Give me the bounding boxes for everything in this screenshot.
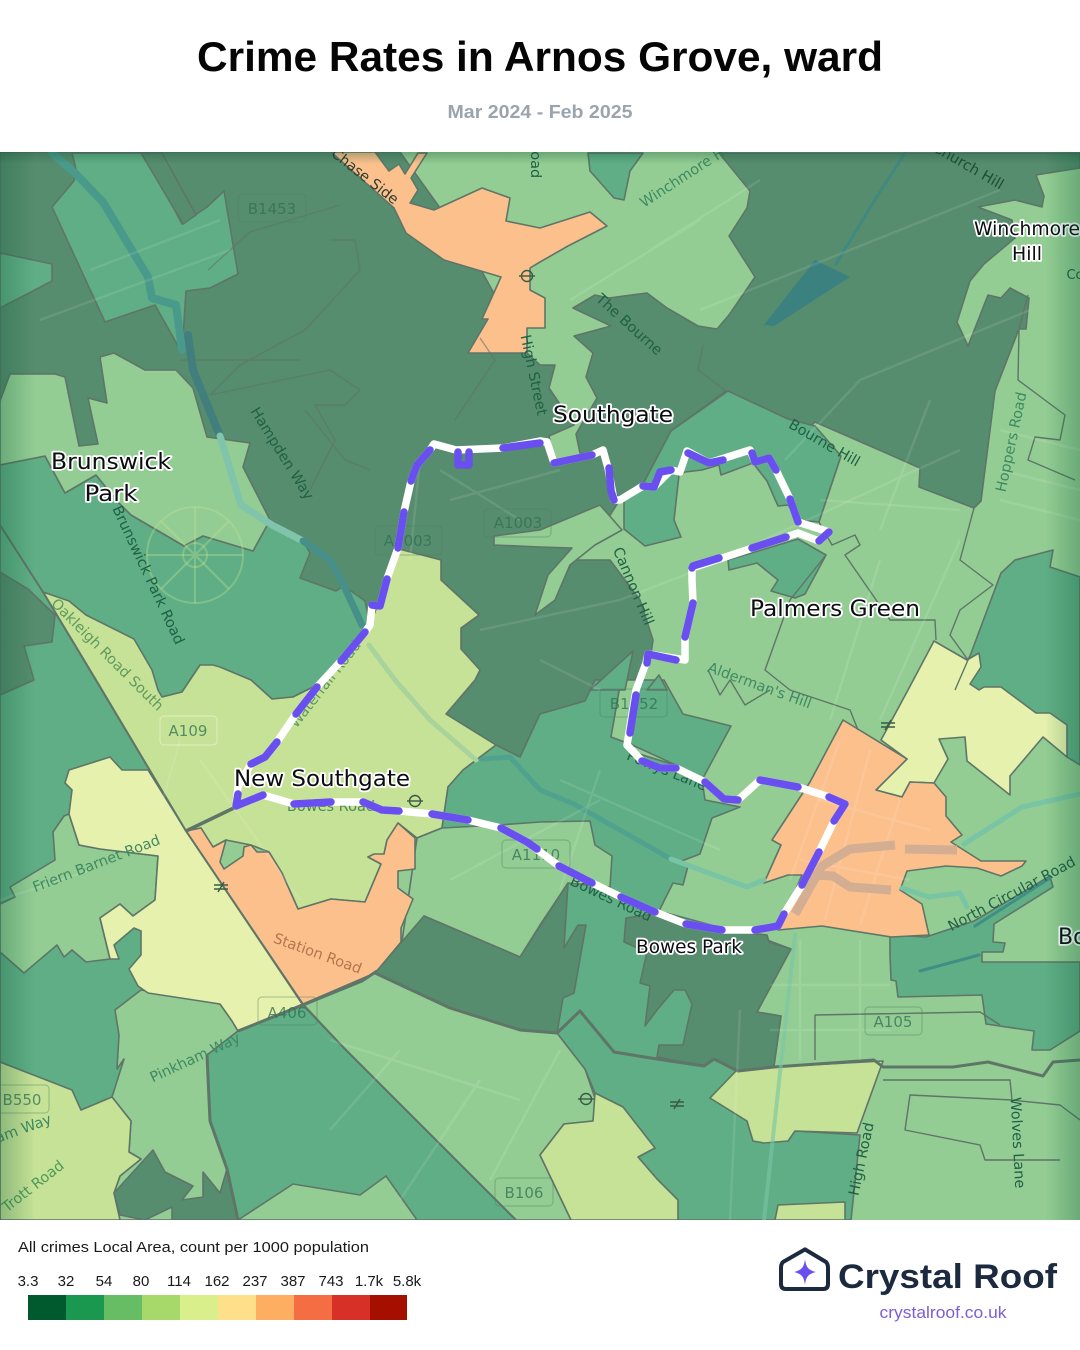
lake bbox=[764, 260, 850, 326]
road shields: B550 bbox=[3, 1091, 41, 1109]
east mid-green bbox=[968, 549, 1080, 766]
legend labels bbox=[18, 1273, 422, 1290]
legend labels: 237 bbox=[242, 1273, 268, 1290]
legend labels: 114 bbox=[167, 1273, 191, 1290]
road shields: A406 bbox=[268, 1004, 306, 1022]
minor roads bbox=[0, 180, 1080, 1220]
station icons bbox=[214, 270, 895, 1109]
place labels: Bowes Park bbox=[636, 936, 742, 958]
parcel outlines bbox=[0, 205, 1080, 1220]
legend labels: 32 bbox=[58, 1273, 74, 1290]
brunswick park light bbox=[0, 353, 270, 551]
legend bbox=[18, 1239, 422, 1320]
legend labels: 54 bbox=[96, 1273, 112, 1290]
legend labels: 162 bbox=[204, 1273, 230, 1290]
palmers green mid patches bbox=[624, 391, 841, 546]
legend labels: 743 bbox=[318, 1273, 344, 1290]
road shields: A1110 bbox=[512, 846, 560, 864]
west mid-green bbox=[0, 457, 368, 1109]
place labels: New Southgate bbox=[234, 767, 410, 792]
road labels: Alderman's Hill bbox=[705, 660, 813, 712]
ward boundary: Arnos Grove bbox=[236, 441, 845, 930]
dark base shapes bbox=[0, 152, 653, 757]
road shields: A1003 bbox=[494, 514, 542, 532]
icon: house with star bbox=[781, 1250, 828, 1289]
road labels: Cannon Hill bbox=[609, 545, 656, 628]
map edge shading bbox=[0, 152, 30, 1220]
place labels: Palmers Green bbox=[750, 597, 920, 622]
road labels: Waterfall Road bbox=[287, 638, 365, 731]
motorway lanes bbox=[795, 845, 957, 914]
legend title: All crimes Local Area, count per 1000 population bbox=[18, 1239, 369, 1256]
road labels: Powys Lane bbox=[624, 748, 709, 795]
road labels: Bowes Road bbox=[287, 799, 375, 815]
legend labels: 80 bbox=[133, 1273, 149, 1290]
road shields: A105 bbox=[874, 1013, 912, 1031]
legend labels: 387 bbox=[280, 1273, 306, 1290]
park paths bbox=[147, 507, 243, 603]
yellow-green central bbox=[43, 549, 496, 909]
road labels: Pinkham Way bbox=[148, 1030, 243, 1086]
road labels: Wolves Lane bbox=[1007, 1097, 1027, 1189]
orange north bbox=[331, 152, 607, 353]
subtitle: date range: Mar 2024 - Feb 2025 bbox=[448, 102, 632, 122]
south-west yellow-green bbox=[0, 1062, 141, 1220]
road labels: North Circular Road bbox=[946, 854, 1079, 935]
road shields: A109 bbox=[169, 722, 207, 740]
road labels bbox=[0, 138, 1079, 1216]
legend colour scale bbox=[28, 1295, 407, 1320]
road labels: High Road bbox=[847, 1121, 878, 1197]
road labels: Brunswick Park Road bbox=[108, 503, 187, 647]
road labels: Station Road bbox=[271, 931, 364, 978]
road shields: B1453 bbox=[248, 200, 296, 218]
pale yellow west bbox=[0, 814, 158, 973]
place labels: Hill bbox=[1012, 243, 1042, 265]
place labels: Winchmore bbox=[974, 218, 1080, 240]
road labels: Hoppers Road bbox=[994, 391, 1030, 494]
wordmark: Crystal Roof bbox=[838, 1258, 1058, 1296]
light band A1003 bbox=[494, 505, 622, 615]
legend labels: 3.3 bbox=[18, 1273, 38, 1290]
road labels: Bourne Hill bbox=[786, 417, 862, 470]
road shields: B1152 bbox=[610, 695, 658, 713]
place labels: Southgate bbox=[553, 403, 673, 428]
place labels bbox=[51, 218, 1080, 958]
south dark bbox=[375, 883, 586, 1033]
mid-green centre bbox=[417, 680, 791, 1071]
place labels: Park bbox=[84, 482, 138, 507]
light centre-south bbox=[400, 821, 612, 957]
logo: Crystal Roof bbox=[781, 1250, 1058, 1322]
road labels: Friern Barnet Road bbox=[31, 833, 162, 896]
south light bbox=[303, 973, 597, 1220]
road labels: The Bourne bbox=[592, 291, 665, 359]
rivers and lake bbox=[52, 153, 1080, 1220]
road shields: B106 bbox=[505, 1184, 543, 1202]
website: crystalroof.co.uk bbox=[880, 1304, 1007, 1322]
road labels: Road bbox=[527, 142, 543, 178]
road labels: High Street bbox=[517, 333, 549, 417]
orange east bbox=[764, 720, 1026, 937]
road labels: Oakleigh Road South bbox=[47, 596, 166, 715]
legend labels: 5.8k bbox=[393, 1273, 422, 1290]
orange station road bbox=[186, 823, 415, 1005]
mid-green top bbox=[588, 153, 643, 200]
road labels: Bowes Road bbox=[567, 873, 654, 925]
road labels: Church Hill bbox=[930, 140, 1006, 193]
south mid-green bbox=[207, 1004, 516, 1220]
road labels: Chase Side bbox=[328, 146, 401, 208]
title: Crime Rates in Arnos Grove, ward bbox=[197, 33, 883, 80]
road shields: A1003 bbox=[384, 532, 432, 550]
road shields bbox=[0, 194, 922, 1206]
road labels: Hampden Way bbox=[247, 405, 316, 503]
road labels: Trott Road bbox=[0, 1158, 67, 1216]
place labels: Brunswick bbox=[51, 450, 171, 475]
road labels: Winchmore Hill bbox=[638, 138, 738, 211]
legend labels: 1.7k bbox=[355, 1273, 384, 1290]
